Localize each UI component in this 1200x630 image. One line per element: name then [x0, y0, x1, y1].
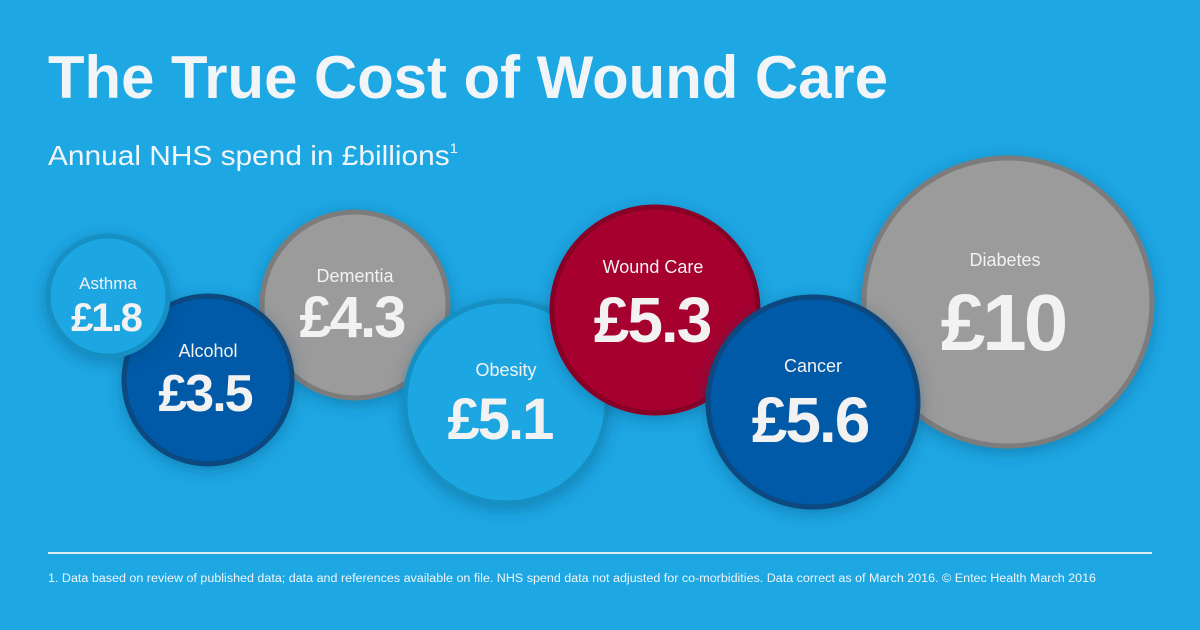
- subtitle: 1: [450, 140, 458, 156]
- bubble: Alcohol: Alcohol: [178, 341, 238, 361]
- bubble: Cancer: [708, 297, 918, 507]
- bubble: Dementia: [262, 212, 448, 398]
- bubble: Diabetes: Diabetes: [969, 250, 1041, 270]
- bubble: Asthma: Asthma: [79, 274, 137, 293]
- bubble: Dementia: Dementia: [316, 266, 395, 286]
- bubble: Diabetes: £10: [941, 278, 1066, 367]
- subtitle: Annual NHS spend in £billions: [48, 140, 425, 171]
- bubble: Wound Care: £5.3: [594, 284, 711, 356]
- bubble: Obesity: [405, 301, 607, 503]
- bubble: Asthma: £1.8: [71, 296, 143, 340]
- bubble: Obesity: Obesity: [475, 360, 537, 380]
- footnote: 1. Data based on review of published data; data and references available on file. NHS spend data not adjusted for co-morbidities. Data correct as of March 2016. © Entec Health March 2016: [48, 573, 1096, 585]
- title: The True Cost of Wound Care: [48, 44, 888, 111]
- bubble: Alcohol: £3.5: [158, 365, 253, 423]
- bubble: Wound Care: Wound Care: [603, 257, 703, 277]
- bubble: Alcohol: [124, 296, 292, 464]
- bubble: Cancer: Cancer: [784, 356, 842, 376]
- bubble: Asthma: [48, 236, 168, 356]
- bubble: Obesity: £5.1: [448, 387, 553, 452]
- bubble: Cancer: £5.6: [752, 384, 869, 456]
- bubble: Wound Care: [552, 207, 758, 413]
- bubble: Diabetes: [864, 158, 1152, 446]
- bubble: Dementia: £4.3: [300, 285, 405, 350]
